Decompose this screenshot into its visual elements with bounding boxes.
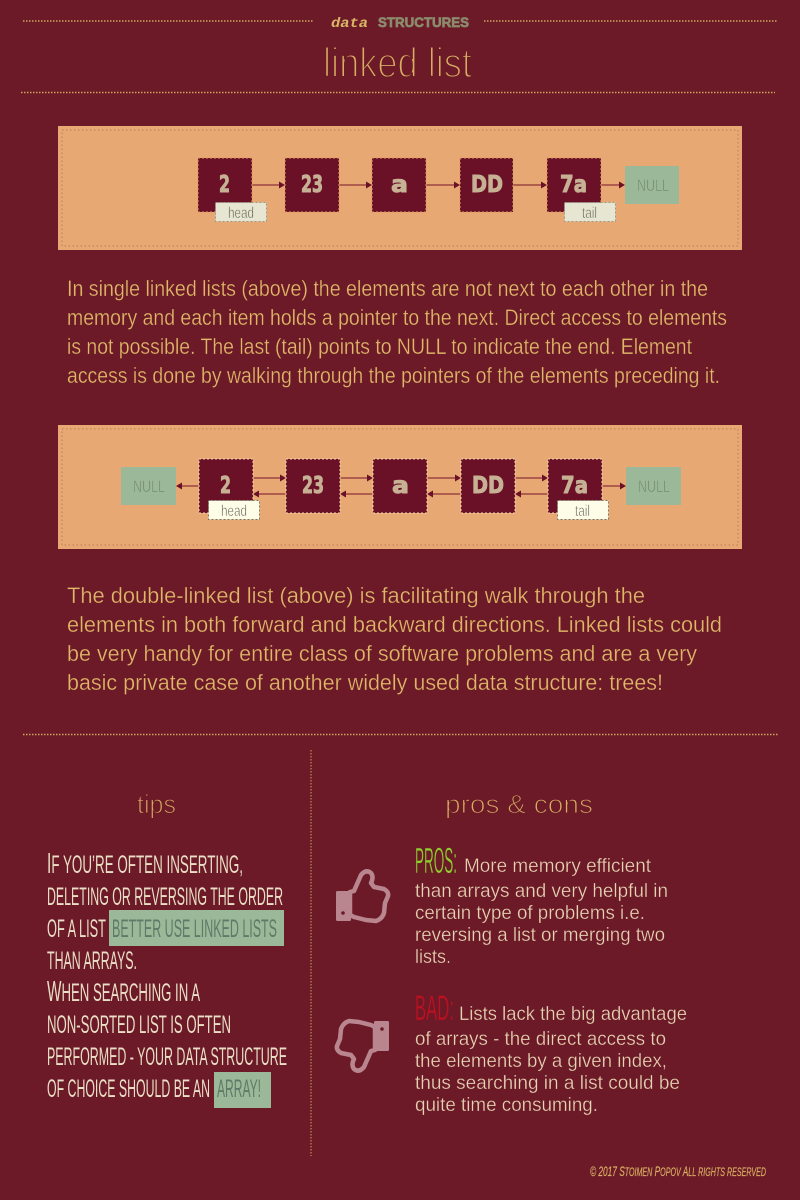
label: head (216, 202, 266, 222)
text block: pros: lists. (415, 946, 451, 968)
label: head: head (221, 503, 247, 520)
text block: tips: THAN ARRAYS. (47, 947, 137, 975)
node: 2: 2 (220, 473, 231, 499)
text block: single linked list description: memory and each item holds a pointer to the next. Direct access to elements (67, 305, 727, 330)
node: DD: DD (471, 172, 503, 198)
text block: pros: certain type of problems i.e. (415, 902, 645, 924)
text block: double linked list description: elements in both forward and backward directions. Linked lists could (67, 612, 722, 637)
node: DD: DD (472, 473, 504, 499)
text block: cons: the elements by a given index, (415, 1050, 667, 1072)
text block: double linked list description: The double-linked list (above) is facilitating walk through the (67, 583, 645, 608)
node: 7a (547, 158, 601, 212)
text block: pros: PROS: (415, 840, 457, 881)
node: DD (461, 459, 515, 513)
node: DD (460, 158, 513, 212)
text block: pros: reversing a list or merging two (415, 924, 665, 946)
null terminator: left: NULL (133, 477, 165, 496)
label: tail (558, 500, 608, 520)
text block: tips (47, 848, 287, 1108)
text block: cons: of arrays - the direct access to (415, 1028, 666, 1050)
heading: pros and cons: pros & cons (445, 789, 593, 819)
highlight: array: ARRAY! (217, 1075, 261, 1103)
text block: single linked list description: In single linked lists (above) the elements are not next to each other in the (67, 276, 708, 301)
text block: single linked list description: is not possible. The last (tail) points to NULL to indicate the end. Element (67, 334, 692, 359)
text block: tips: OF A LIST (47, 915, 106, 943)
node: a (372, 158, 426, 212)
text block: pros (415, 840, 668, 968)
panel: double linked list diagram (58, 425, 742, 549)
highlight: better use linked lists: BETTER USE LINKED LISTS (112, 915, 277, 943)
text block: pros: than arrays and very helpful in (415, 880, 668, 902)
heading: tips: tips (137, 789, 176, 819)
icon: thumbs up (336, 871, 388, 921)
node: 23 (286, 459, 340, 513)
null terminator: left (121, 467, 176, 505)
panel: single linked list diagram (58, 126, 742, 250)
null terminator: right: NULL (638, 477, 670, 496)
text block: cons (415, 989, 687, 1116)
label: tail: tail (575, 503, 590, 520)
null terminator (625, 166, 679, 204)
label: head (208, 500, 260, 520)
text block: cons: BAD: (415, 989, 454, 1028)
header kicker: data structures: data (331, 16, 368, 32)
node: 23: 23 (301, 172, 323, 198)
node: 7a (548, 459, 602, 513)
label: tail (564, 202, 616, 222)
text block: tips: WHEN SEARCHING IN A (47, 976, 200, 1008)
node: 23: 23 (302, 473, 324, 499)
label: head: head (228, 205, 254, 222)
node: a: a (391, 172, 408, 198)
text block: tips: DELETING OR REVERSING THE ORDER (47, 883, 283, 911)
text block: cons: Lists lack the big advantage (459, 1003, 687, 1025)
text block: cons: thus searching in a list could be (415, 1072, 680, 1094)
null terminator: NULL (637, 176, 669, 195)
icon: thumbs down (337, 1021, 389, 1071)
text block: tips: NON-SORTED LIST IS OFTEN (47, 1011, 231, 1039)
null terminator: right (626, 467, 681, 505)
node: 2 (198, 158, 252, 212)
text block: tips: IF YOU’RE OFTEN INSERTING, (47, 848, 243, 880)
text block: cons: quite time consuming. (415, 1094, 598, 1116)
title: linked list (323, 39, 472, 86)
text: PERFORMED - YOUR DATA STRUCTURE (47, 1043, 287, 1071)
arrows: forward and backward pointers (176, 474, 626, 498)
text block: double linked list description: basic private case of another widely used data structure: trees! (67, 670, 663, 695)
node: 23 (285, 158, 339, 212)
highlight: array (214, 1072, 271, 1108)
text block: single linked list description: access is done by walking through the pointers of the elements preceding it. (67, 363, 720, 388)
node: 7a: 7a (561, 473, 588, 499)
highlight: better use linked lists (109, 910, 284, 946)
header kicker: data structures (331, 14, 469, 32)
text block: tips: OF CHOICE SHOULD BE AN (47, 1075, 210, 1103)
text block: pros: More memory efficient (464, 855, 652, 877)
node: 7a: 7a (560, 172, 587, 198)
node: a: a (392, 473, 409, 499)
label: tail: tail (582, 205, 597, 222)
header kicker: data structures: STRUCTURES (378, 14, 469, 30)
node: 2 (199, 459, 253, 513)
text block: single linked list description (67, 276, 727, 388)
text block: double linked list description (67, 583, 722, 695)
arrows: forward pointers (252, 182, 625, 188)
text block: double linked list description: be very handy for entire class of software problems and are a very (67, 641, 697, 666)
node: a (373, 459, 427, 513)
node: 2: 2 (219, 172, 230, 198)
